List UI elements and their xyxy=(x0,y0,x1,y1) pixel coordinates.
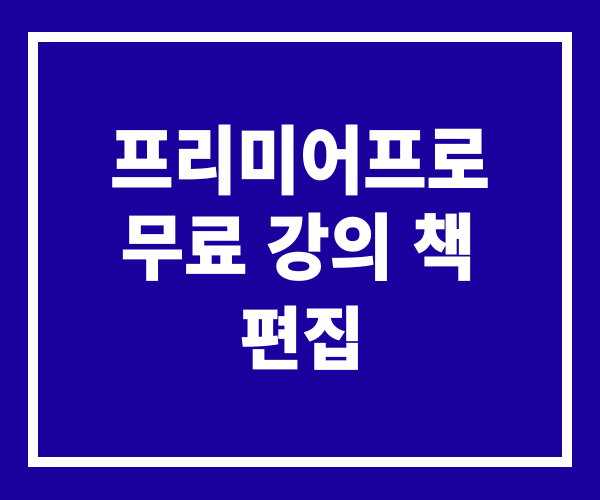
title: 프리미어프로 xyxy=(110,121,490,204)
title xyxy=(110,121,490,379)
white border frame xyxy=(28,32,572,467)
title: 무료 강의 책 xyxy=(121,210,475,289)
title: 편집 xyxy=(240,302,364,379)
